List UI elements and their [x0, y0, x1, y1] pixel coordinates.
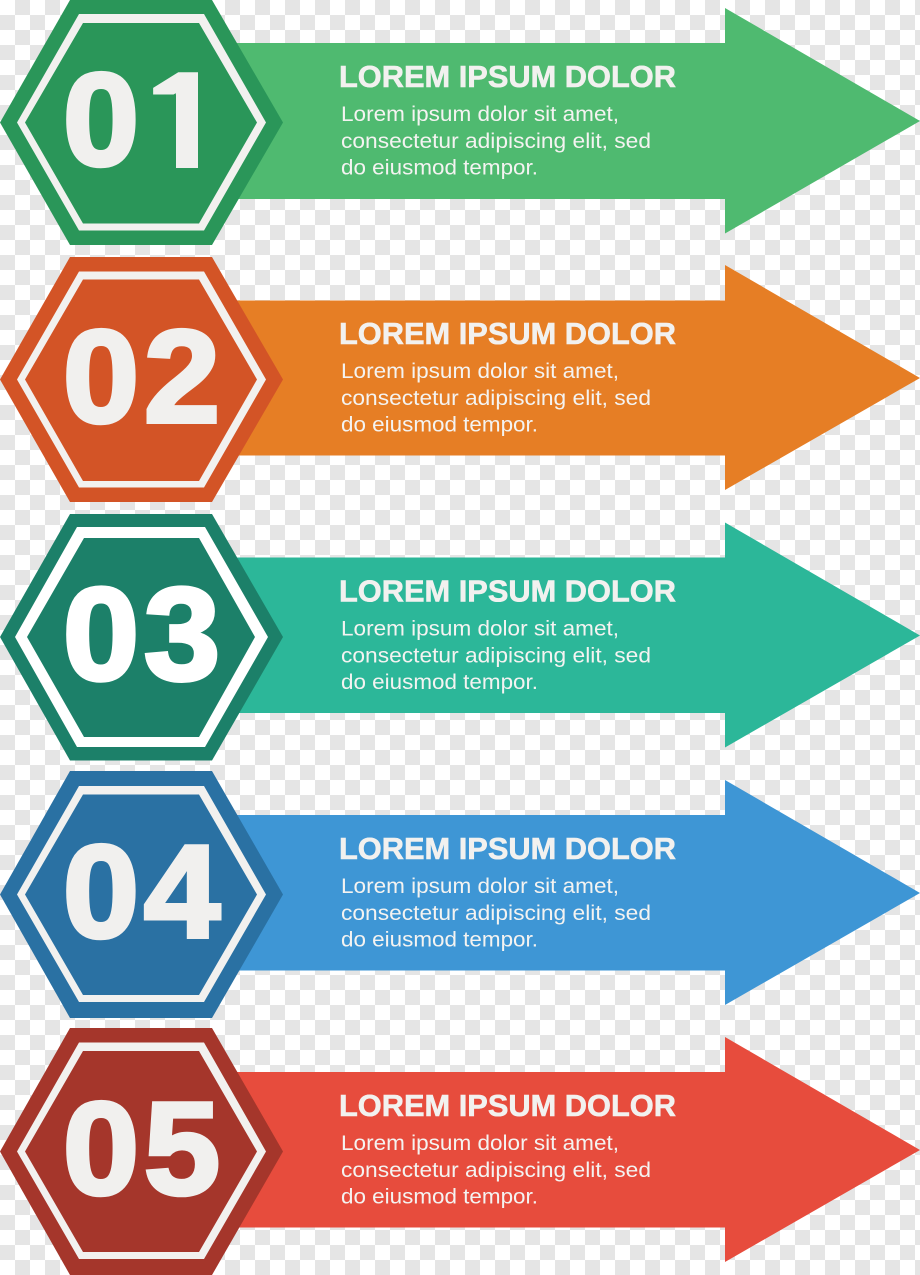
body text: Lorem ipsum dolor sit amet, — [341, 102, 619, 126]
arrow: orange — [230, 265, 920, 490]
arrow: teal — [230, 522, 920, 748]
number 03: 0 — [63, 560, 139, 708]
heading: LOREM IPSUM DOLOR — [339, 316, 676, 351]
number 03 — [63, 560, 220, 708]
number 05: 0 — [63, 1074, 139, 1222]
number 02: 0 — [63, 302, 139, 450]
panel: step 03 — [0, 514, 920, 760]
hexagon badge: teal — [0, 514, 283, 760]
panel: step 01 — [0, 0, 920, 245]
panel: step 04 — [0, 771, 920, 1018]
body text: consectetur adipiscing elit, sed — [341, 386, 651, 410]
number 04: 0 — [63, 817, 139, 965]
body text: do eiusmod tempor. — [341, 412, 538, 436]
hexagon ring — [17, 272, 266, 488]
number 01: 0 — [63, 45, 139, 193]
hexagon ring — [17, 1042, 266, 1259]
hexagon ring — [17, 786, 266, 1002]
arrow: blue — [230, 780, 920, 1005]
number 02 — [63, 302, 220, 450]
body text: Lorem ipsum dolor sit amet, — [341, 1131, 619, 1155]
body text: do eiusmod tempor. — [341, 1184, 538, 1208]
body text: Lorem ipsum dolor sit amet, — [341, 359, 619, 383]
heading: LOREM IPSUM DOLOR — [339, 831, 676, 866]
number 03: 3 — [144, 560, 220, 708]
body text: consectetur adipiscing elit, sed — [341, 901, 651, 925]
panel: step 05 — [0, 1028, 920, 1275]
body text: do eiusmod tempor. — [341, 670, 538, 694]
arrow: red — [230, 1037, 920, 1262]
body text — [341, 1131, 651, 1208]
panel: step 02 — [0, 257, 920, 502]
hexagon badge: blue — [0, 771, 283, 1018]
arrow: green — [230, 8, 920, 234]
number 01: 1 — [146, 45, 222, 193]
number 04 — [63, 817, 220, 965]
number 05 — [63, 1074, 220, 1222]
heading: LOREM IPSUM DOLOR — [339, 1088, 676, 1123]
number 04: 4 — [144, 817, 220, 965]
hexagon badge: red — [0, 1028, 283, 1275]
body text: do eiusmod tempor. — [341, 928, 538, 952]
body text — [341, 102, 651, 180]
body text — [341, 874, 651, 952]
hexagon ring — [15, 527, 268, 747]
number 01 — [66, 70, 198, 168]
body text: do eiusmod tempor. — [341, 156, 538, 180]
body text: consectetur adipiscing elit, sed — [341, 1158, 651, 1182]
body text: consectetur adipiscing elit, sed — [341, 644, 651, 668]
heading: LOREM IPSUM DOLOR — [339, 574, 676, 608]
heading: LOREM IPSUM DOLOR — [339, 59, 676, 94]
body text — [341, 616, 651, 694]
body text: Lorem ipsum dolor sit amet, — [341, 616, 619, 640]
hexagon badge: orange — [0, 257, 283, 502]
body text: consectetur adipiscing elit, sed — [341, 129, 651, 153]
body text: Lorem ipsum dolor sit amet, — [341, 874, 619, 898]
number 05: 5 — [144, 1074, 220, 1222]
hexagon ring — [17, 14, 266, 230]
number 02: 2 — [144, 302, 220, 450]
body text — [341, 359, 651, 436]
hexagon badge: green — [0, 0, 283, 245]
